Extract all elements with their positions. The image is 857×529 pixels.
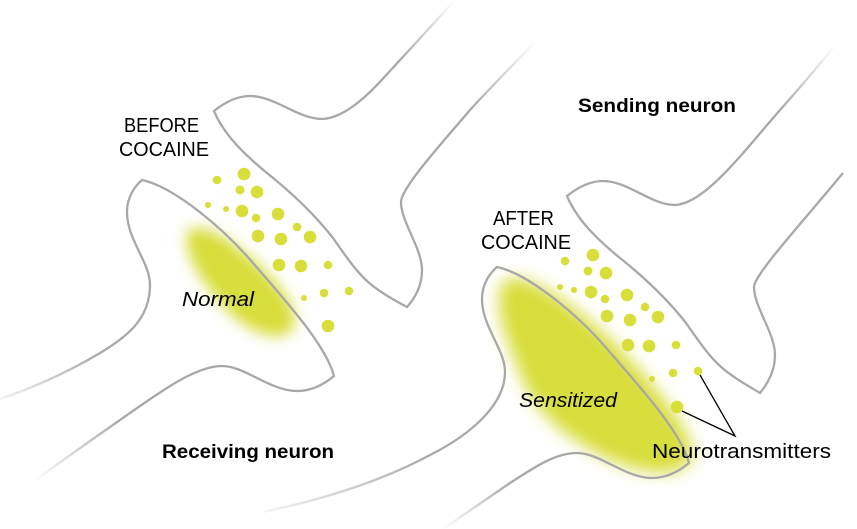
label: receiving neuron: Receiving neuron	[162, 441, 334, 463]
neurotransmitter pointer lines	[682, 375, 735, 436]
label: after cocaine: COCAINE	[481, 231, 571, 254]
right sending neuron outline	[567, 45, 843, 393]
label: after cocaine	[481, 207, 571, 254]
normal receptor glow	[186, 228, 295, 336]
label: before cocaine	[119, 114, 209, 161]
label: sensitized: Sensitized	[519, 389, 618, 412]
sensitized receptor glow	[499, 278, 692, 472]
right receiving neuron outline	[263, 267, 689, 529]
label: after cocaine: AFTER	[493, 207, 554, 230]
neurotransmitters: before cocaine	[205, 168, 353, 332]
neurotransmitters: after cocaine	[557, 249, 702, 413]
label: normal: Normal	[182, 288, 256, 311]
left sending neuron outline	[214, 0, 535, 307]
label: neurotransmitters: Neurotransmitters	[652, 440, 831, 463]
label: before cocaine: BEFORE	[124, 114, 199, 137]
label: before cocaine: COCAINE	[119, 138, 209, 161]
label: sending neuron: Sending neuron	[578, 95, 736, 117]
left receiving neuron outline	[0, 180, 334, 482]
